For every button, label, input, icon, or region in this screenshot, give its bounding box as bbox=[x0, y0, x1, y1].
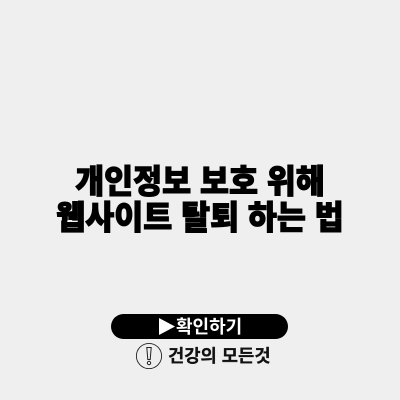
title bbox=[56, 155, 344, 239]
button icon: play triangle bbox=[159, 318, 175, 335]
button label: 확인하기 bbox=[176, 313, 242, 339]
brand name: 건강의 모든것 bbox=[168, 342, 271, 368]
title line 2: 웹사이트 탈퇴 하는 법 bbox=[56, 191, 344, 239]
brand bbox=[136, 342, 271, 369]
title line 1: 개인정보 보호 위해 bbox=[75, 155, 325, 203]
button: confirm bbox=[111, 314, 288, 339]
icon: exclamation circle bbox=[136, 343, 162, 369]
